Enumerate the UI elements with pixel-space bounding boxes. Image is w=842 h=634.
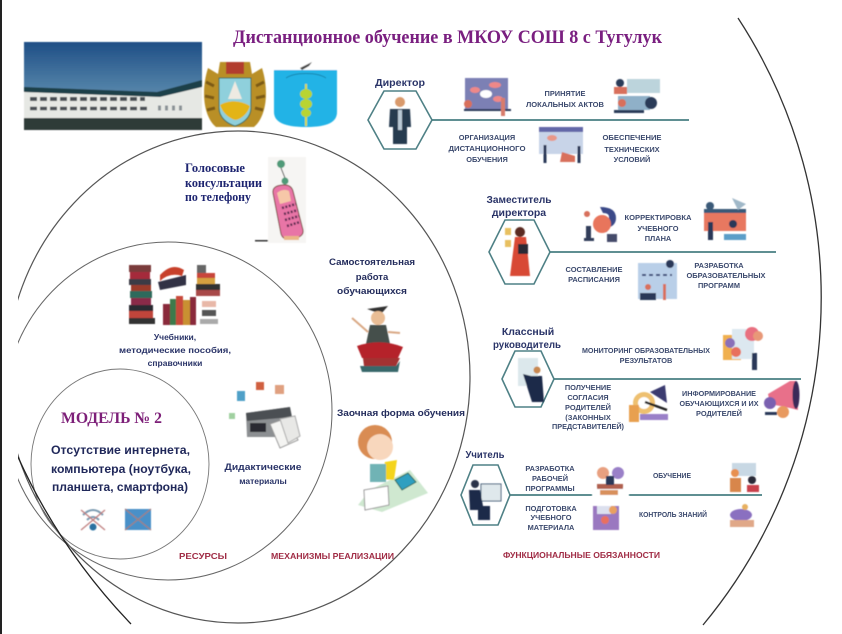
heading: class teacher bbox=[493, 326, 562, 351]
text: no internet: Отсутствие интернета, bbox=[51, 443, 190, 457]
text: correspondence form: Заочная форма обучения bbox=[337, 408, 465, 419]
text: textbooks: Учебники, bbox=[154, 332, 196, 342]
icon: training bbox=[730, 463, 759, 492]
divider line bbox=[432, 119, 689, 121]
icon: team at boards bbox=[614, 79, 660, 113]
text: informing: РОДИТЕЛЕЙ bbox=[696, 409, 742, 418]
text: parental consent bbox=[552, 383, 625, 431]
text: developing programmes bbox=[686, 261, 766, 290]
text: voice consultations: Голосовые bbox=[185, 161, 245, 175]
text: textbooks bbox=[119, 332, 231, 368]
text: informing bbox=[680, 389, 759, 418]
text: didactic materials: Дидактические bbox=[224, 462, 302, 472]
panel: teacher bbox=[461, 449, 762, 532]
text: textbooks: методические пособия, bbox=[119, 345, 231, 355]
icon: distance learning bbox=[539, 127, 583, 163]
title: Дистанционное обучение в МКОУ СОШ 8 с Тугулук bbox=[233, 27, 662, 48]
text: knowledge control: КОНТРОЛЬ ЗНАНИЙ bbox=[639, 510, 707, 519]
text: preparing material: ПОДГОТОВКА bbox=[525, 504, 577, 513]
circle: resources bbox=[4, 242, 332, 580]
text: curriculum correction bbox=[624, 213, 692, 243]
heading: class teacher: руководитель bbox=[493, 339, 562, 351]
text: didactic materials bbox=[224, 462, 302, 486]
text: informing: ОБУЧАЮЩИХСЯ И ИХ bbox=[680, 399, 759, 408]
icon: programme bbox=[592, 467, 629, 497]
divider line bbox=[554, 378, 801, 380]
photo: school building bbox=[24, 42, 202, 130]
icon: local acts bbox=[464, 78, 511, 116]
text: curriculum correction: УЧЕБНОГО bbox=[638, 224, 679, 233]
icon: book stacks bbox=[129, 265, 220, 325]
icon: material bbox=[593, 506, 619, 530]
text: monitoring bbox=[582, 346, 710, 365]
text: developing programmes: РАЗРАБОТКА bbox=[694, 261, 744, 270]
text: technical conditions: ТЕХНИЧЕСКИХ bbox=[604, 145, 660, 154]
icon: knowledge control bbox=[730, 504, 754, 527]
panel: class teacher bbox=[493, 326, 801, 431]
text: curriculum correction: КОРРЕКТИРОВКА bbox=[624, 213, 692, 222]
icon: boy reading bbox=[358, 425, 428, 512]
icon: director hexagon bbox=[368, 91, 432, 149]
arc: outer right bbox=[703, 18, 821, 625]
text: parental consent: СОГЛАСИЯ bbox=[567, 393, 609, 402]
divider line bbox=[550, 251, 776, 253]
text: work programme: РАЗРАБОТКА bbox=[525, 464, 575, 473]
text: work programme: РАБОЧЕЙ bbox=[532, 474, 568, 483]
text: curriculum correction: ПЛАНА bbox=[645, 234, 672, 243]
icon: regional coat of arms bbox=[204, 62, 266, 127]
text: voice consultations: консультации bbox=[185, 176, 262, 190]
text: didactic materials: материалы bbox=[239, 476, 287, 486]
text: scheduling bbox=[566, 265, 623, 284]
text: preparing material bbox=[525, 504, 577, 532]
text: developing programmes: ОБРАЗОВАТЕЛЬНЫХ bbox=[686, 271, 766, 280]
text: monitoring: МОНИТОРИНГ ОБРАЗОВАТЕЛЬНЫХ bbox=[582, 346, 710, 355]
text: independent work: обучающихся bbox=[337, 286, 407, 297]
heading: teacher: Учитель bbox=[466, 449, 505, 461]
text: organization of distance learning: ОРГАНИЗАЦИЯ bbox=[459, 133, 515, 142]
text: technical conditions: ОБЕСПЕЧЕНИЕ bbox=[602, 133, 662, 142]
label: functional duties: ФУНКЦИОНАЛЬНЫЕ ОБЯЗАННОСТИ bbox=[503, 550, 660, 560]
text: scheduling: СОСТАВЛЕНИЕ bbox=[566, 265, 623, 274]
icon: curriculum correction bbox=[584, 207, 617, 242]
heading: model 2: МОДЕЛЬ № 2 bbox=[61, 410, 162, 427]
heading: deputy director: Заместитель bbox=[486, 194, 552, 206]
text: organization of distance learning: ДИСТАНЦИОННОГО bbox=[448, 144, 526, 153]
circle: implementation mechanisms bbox=[6, 131, 470, 623]
text: no internet: планшета, смартфона) bbox=[52, 480, 188, 494]
icon: school building scene bbox=[704, 198, 746, 240]
icon: no computer bbox=[125, 509, 151, 530]
icon: copier and documents bbox=[229, 382, 300, 448]
panel: deputy director bbox=[486, 194, 776, 300]
text: adoption of local acts: ЛОКАЛЬНЫХ АКТОВ bbox=[526, 100, 604, 109]
text: monitoring: РЕЗУЛЬТАТОВ bbox=[620, 356, 672, 365]
text: parental consent: (ЗАКОННЫХ bbox=[565, 413, 611, 422]
text: work programme bbox=[525, 464, 575, 493]
label: resources: РЕСУРСЫ bbox=[179, 551, 227, 561]
icon: deputy hexagon bbox=[489, 220, 550, 284]
icon: monitoring bbox=[723, 327, 763, 370]
heading: director: Директор bbox=[375, 77, 425, 89]
text: scheduling: РАСПИСАНИЯ bbox=[568, 275, 620, 284]
text: technical conditions bbox=[602, 133, 662, 164]
text: no internet: компьютера (ноутбука, bbox=[51, 462, 191, 476]
text: parental consent: РОДИТЕЛЕЙ bbox=[565, 403, 611, 412]
text: voice consultations: по телефону bbox=[185, 190, 252, 204]
text: textbooks: справочники bbox=[148, 358, 202, 368]
text: preparing material: МАТЕРИАЛА bbox=[528, 523, 575, 532]
text: independent work: работа bbox=[356, 272, 389, 283]
icon: phone bbox=[255, 157, 306, 243]
text: developing programmes: ПРОГРАММ bbox=[698, 281, 740, 290]
icon: target bbox=[629, 385, 668, 422]
heading: deputy director: директора bbox=[492, 207, 546, 219]
circle: model 2 bbox=[31, 369, 209, 559]
text: parental consent: ПРЕДСТАВИТЕЛЕЙ) bbox=[552, 422, 625, 431]
icon: district shield bbox=[274, 60, 337, 127]
icon: no wifi bbox=[81, 510, 105, 530]
text: adoption of local acts bbox=[526, 89, 604, 109]
text: parental consent: ПОЛУЧЕНИЕ bbox=[565, 383, 611, 392]
icon: megaphone bbox=[764, 381, 800, 418]
text: preparing material: УЧЕБНОГО bbox=[531, 513, 572, 522]
text: adoption of local acts: ПРИНЯТИЕ bbox=[545, 89, 586, 98]
divider line bbox=[510, 494, 762, 496]
text: organization of distance learning bbox=[448, 133, 526, 164]
heading: deputy director bbox=[486, 194, 552, 219]
label: mechanisms: МЕХАНИЗМЫ РЕАЛИЗАЦИИ bbox=[271, 551, 394, 561]
text: organization of distance learning: ОБУЧЕНИЯ bbox=[466, 155, 508, 164]
text: informing: ИНФОРМИРОВАНИЕ bbox=[682, 389, 756, 398]
heading: class teacher: Классный bbox=[502, 326, 554, 338]
text: training: ОБУЧЕНИЕ bbox=[653, 471, 691, 480]
icon: teacher hexagon bbox=[461, 465, 510, 525]
icon: class teacher hexagon bbox=[502, 351, 554, 407]
panel: director bbox=[368, 77, 689, 164]
text: independent work bbox=[329, 257, 415, 297]
icon: student on books bbox=[352, 306, 403, 372]
text: no internet bbox=[51, 443, 191, 494]
text: work programme: ПРОГРАММЫ bbox=[525, 484, 575, 493]
arc: outer left bbox=[18, 457, 131, 624]
text: voice consultations bbox=[185, 161, 262, 204]
text: technical conditions: УСЛОВИЙ bbox=[614, 155, 650, 164]
icon: timetable bbox=[638, 260, 677, 300]
text: independent work: Самостоятельная bbox=[329, 257, 415, 268]
